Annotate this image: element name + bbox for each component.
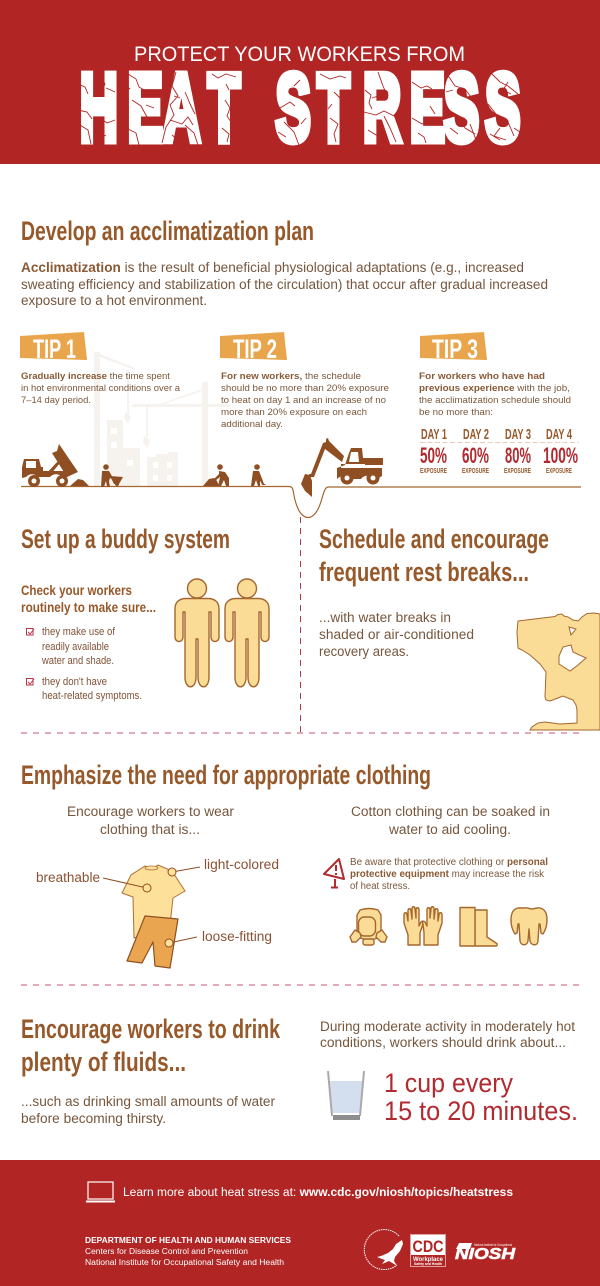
rest break text: ...with water breaks in (319, 610, 451, 625)
callout: 1 cup every 15 to 20 minutes: 1 cup every (384, 1068, 513, 1098)
agency text (85, 1236, 292, 1267)
logo: CDC: CDC (412, 1237, 444, 1256)
icon: boots (460, 908, 497, 946)
tip 3 (419, 332, 579, 475)
acclimatization paragraph: exposure to a hot environment. (21, 293, 207, 308)
buddy checklist: Check your workers (21, 582, 132, 598)
tip 2 (220, 332, 389, 430)
tip 2 text (221, 371, 389, 430)
acclimatization paragraph: sweating efficiency and stabilization of the circulation) that occur after gradual increased (21, 277, 548, 292)
clothing left text: Encourage workers to wear (67, 804, 235, 819)
exposure schedule: 50% (420, 443, 447, 468)
buddy checklist: they make use of (42, 626, 116, 638)
checkbox one (26, 628, 34, 635)
heading: acclimatization plan: Develop an acclimatization plan (21, 216, 314, 246)
tip 2 text: additional day. (221, 419, 283, 430)
callout dots (143, 868, 176, 947)
tip 1 text: Gradually increase the time spent (21, 371, 170, 382)
tip 1 (20, 332, 181, 406)
heading: buddy system: Set up a buddy system (21, 524, 230, 554)
icon: worker with pick (251, 464, 266, 486)
logo: CDC: Safety and Health (414, 1262, 442, 1266)
tip 3 text: be no more than: (419, 407, 493, 418)
buddy checklist: readily available (42, 641, 109, 653)
icon: respirator (350, 908, 387, 945)
tip 3 text (419, 371, 571, 418)
rest break text: recovery areas. (319, 644, 409, 659)
clothing right text: water to aid cooling. (388, 822, 511, 837)
clothing diagram (36, 857, 279, 968)
clothing right text (351, 804, 550, 837)
logo: HHS (364, 1230, 403, 1270)
logo: NIOSH: NIOSH (455, 1246, 516, 1263)
tip 3 text: For workers who have had (419, 371, 545, 382)
tip 2 badge: TIP 2 (233, 334, 277, 364)
clothing right text: Cotton clothing can be soaked in (351, 804, 550, 819)
footer band (0, 1160, 600, 1286)
logo: CDC: Workplace (413, 1256, 443, 1263)
subtitle: PROTECT YOUR WORKERS FROM (134, 43, 465, 66)
icon: dump truck (22, 444, 89, 487)
heading: fluids: plenty of fluids... (21, 1047, 186, 1077)
icon: laptop (86, 1182, 115, 1202)
tip 1 badge (20, 332, 87, 364)
icon: protective suit (511, 908, 547, 945)
header banner (0, 0, 600, 164)
tip 2 text: to heat on day 1 and an increase of no (221, 395, 386, 406)
person two (225, 579, 269, 687)
warning text: Be aware that protective clothing or personal (350, 857, 548, 868)
agency text: Centers for Disease Control and Prevention (85, 1247, 248, 1256)
fluids text: before becoming thirsty. (21, 1111, 166, 1126)
icon: excavator (301, 438, 383, 497)
heading: fluids (21, 1014, 281, 1077)
callout: 1 cup every 15 to 20 minutes (384, 1068, 578, 1126)
checkbox two (26, 678, 34, 685)
moderate activity text (320, 1019, 575, 1050)
icon: warning sign (324, 859, 344, 888)
exposure schedule: EXPOSURE (546, 466, 572, 475)
tip 1 text: 7–14 day period. (21, 395, 91, 406)
rest break text: shaded or air-conditioned (319, 627, 474, 642)
tip 2 text: For new workers, the schedule (221, 371, 361, 382)
moderate activity text: conditions, workers should drink about... (320, 1035, 566, 1050)
acclimatization paragraph: Acclimatization is the result of beneficial physiological adaptations (e.g., increased (21, 260, 524, 275)
buddy checklist: routinely to make sure... (21, 599, 156, 615)
exposure schedule: 80% (505, 443, 531, 468)
buddy checklist: they don't have (42, 676, 107, 688)
tip 3 text: previous experience with the job, (419, 383, 570, 394)
exposure schedule (420, 426, 579, 475)
tip 1 badge: TIP 1 (33, 334, 76, 364)
label: breathable: breathable (36, 870, 100, 885)
vertical divider (300, 517, 302, 733)
exposure schedule: 100% (543, 443, 578, 468)
person one (175, 579, 219, 687)
agency text: DEPARTMENT OF HEALTH AND HUMAN SERVICES (85, 1236, 292, 1245)
rest break text (319, 610, 474, 659)
construction scene background (94, 352, 230, 486)
logo: NIOSH: National Institute for Occupational (474, 1243, 512, 1247)
exposure schedule: EXPOSURE (420, 466, 447, 475)
tip 3 badge (420, 332, 487, 364)
warning text: of heat stress. (350, 881, 410, 892)
buddy checklist (21, 582, 156, 702)
buddy checklist: heat-related symptoms. (42, 690, 142, 702)
agency text: National Institute for Occupational Safety and Health (85, 1258, 284, 1267)
heading: rest breaks: frequent rest breaks... (319, 557, 529, 587)
exposure schedule: DAY 4 (546, 426, 572, 443)
icon: shirt (122, 865, 185, 938)
tip 1 text (21, 371, 181, 406)
heading: clothing: Emphasize the need for appropriate clothing (21, 760, 431, 790)
horizontal divider (21, 984, 581, 986)
icon: worker shoveling (203, 464, 229, 486)
tip 2 text: should be no more than 20% exposure (221, 383, 389, 394)
ground line with dip (21, 486, 581, 518)
icon: shorts (127, 916, 178, 968)
fluids text: ...such as drinking small amounts of water (21, 1094, 276, 1109)
callout lines (103, 867, 200, 943)
tip 2 text: more than 20% exposure on each (221, 407, 367, 418)
callout: 1 cup every 15 to 20 minutes: 15 to 20 minutes. (384, 1096, 578, 1126)
icon: water glass (328, 1071, 364, 1120)
icon: two workers (175, 579, 269, 687)
acclimatization paragraph (21, 260, 548, 308)
icon: shade shape (517, 613, 600, 730)
logo: CDC (410, 1234, 446, 1266)
main title: HEAT STRESS (80, 55, 520, 162)
buddy checklist: water and shade. (41, 655, 114, 667)
learn more link: Learn more about heat stress at: www.cdc.gov/niosh/topics/heatstress (123, 1187, 513, 1199)
heading: rest breaks (319, 524, 549, 587)
icon: gloves (404, 907, 442, 945)
exposure schedule: 60% (462, 443, 489, 468)
exposure schedule: DAY 3 (505, 426, 531, 443)
moderate activity text: During moderate activity in moderately hot (320, 1019, 575, 1034)
warning text (350, 857, 548, 892)
tip 3 text: the acclimatization schedule should (419, 395, 571, 406)
clothing left text (67, 804, 235, 837)
clothing left text: clothing that is... (100, 822, 200, 837)
horizontal divider (21, 732, 581, 734)
exposure schedule: DAY 2 (463, 426, 489, 443)
label: light-colored: light-colored (204, 857, 279, 872)
warning text: protective equipment may increase the risk (350, 869, 545, 880)
exposure schedule: DAY 1 (421, 426, 447, 443)
fluids text (21, 1094, 276, 1126)
icon: worker with wheelbarrow (101, 464, 123, 487)
tip 1 text: in hot environmental conditions over a (21, 383, 181, 394)
exposure schedule: EXPOSURE (462, 466, 489, 475)
exposure schedule: EXPOSURE (504, 466, 531, 475)
tip 2 badge (220, 332, 287, 364)
heading: fluids: Encourage workers to drink (21, 1014, 281, 1044)
tip 3 badge: TIP 3 (432, 334, 478, 364)
label: loose-fitting: loose-fitting (202, 929, 272, 944)
